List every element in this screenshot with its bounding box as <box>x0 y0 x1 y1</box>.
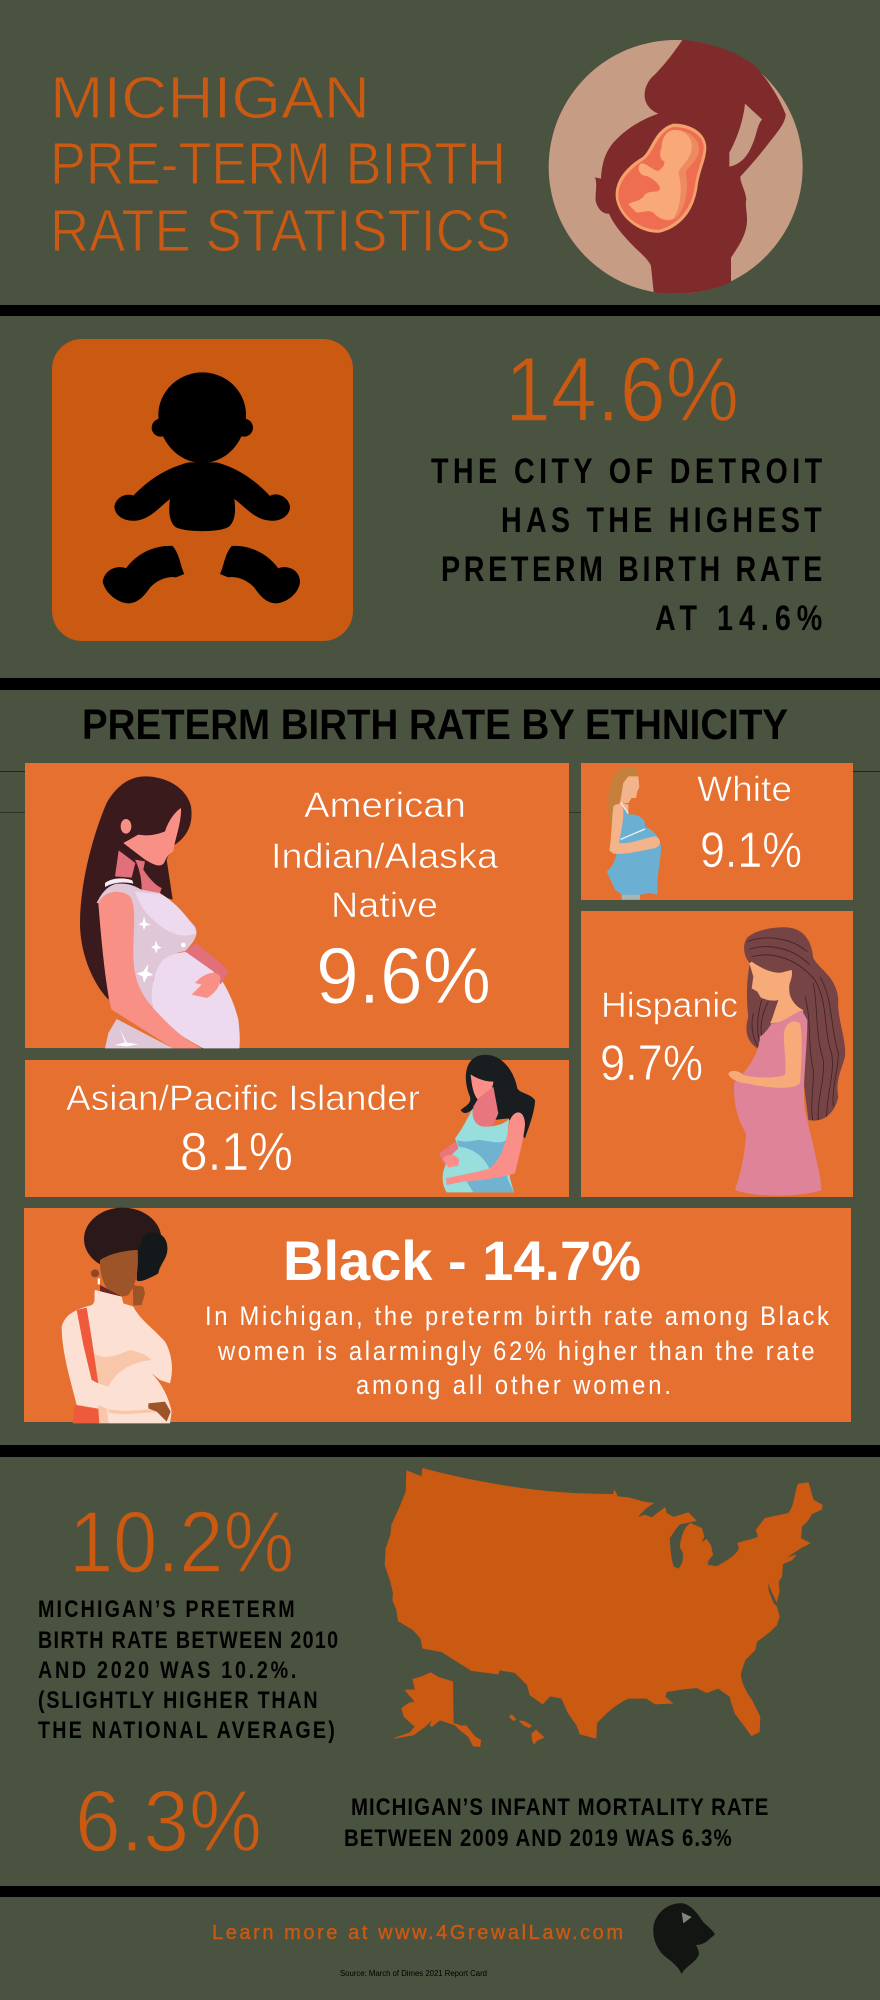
text block: Detroit statement: AT 14.6% <box>655 598 822 638</box>
title <box>50 65 511 264</box>
text block: disparity statement: women is alarmingly 62% higher than the rate <box>217 1337 815 1366</box>
heading and value: Black - 14.7% <box>283 1229 641 1292</box>
stat: 6.3%: 6.3% <box>75 1773 262 1870</box>
label and value <box>600 986 738 1091</box>
panel: American Indian/Alaska Native <box>25 763 569 1048</box>
title: PRE-TERM BIRTH <box>50 131 506 197</box>
label and value: 9.7% <box>600 1035 703 1091</box>
label and value: Indian/Alaska <box>271 837 499 876</box>
illustration: pregnant woman with long dark hair <box>80 776 240 1048</box>
panel: baby silhouette icon <box>52 339 353 641</box>
source note: Source: March of Dimes 2021 Report Card <box>340 1969 487 1978</box>
panel: Asian/Pacific Islander <box>25 1055 569 1197</box>
illustration: pregnant Black woman in cream sweater <box>62 1208 172 1423</box>
map: United States <box>385 1468 822 1747</box>
text block: Michigan preterm rate: MICHIGAN’S PRETERM <box>38 1595 295 1622</box>
text block: Detroit statement: HAS THE HIGHEST <box>501 500 822 540</box>
text block: Michigan preterm rate: THE NATIONAL AVERAGE) <box>38 1716 335 1743</box>
text block: Michigan preterm rate: (SLIGHTLY HIGHER THAN <box>38 1686 318 1713</box>
panel: Hispanic <box>581 911 853 1197</box>
text block: Michigan preterm rate: BIRTH RATE BETWEEN 2010 <box>38 1626 338 1653</box>
title: RATE STATISTICS <box>50 198 511 264</box>
text block: Detroit statement <box>431 451 823 638</box>
text block: Detroit statement: PRETERM BIRTH RATE <box>441 549 822 589</box>
label and value: Hispanic <box>601 986 738 1025</box>
text block: disparity statement <box>205 1302 829 1400</box>
illustration: pregnant woman in pink dress <box>728 927 845 1196</box>
label and value <box>66 1079 420 1182</box>
text block: disparity statement: among all other women. <box>356 1371 671 1400</box>
panel: Black <box>24 1208 851 1423</box>
heading: preterm birth rate by ethnicity: PRETERM BIRTH RATE BY ETHNICITY <box>82 701 788 749</box>
icon: pregnant silhouette with fetus <box>549 40 803 294</box>
label and value <box>271 786 499 1020</box>
text block: infant mortality: MICHIGAN’S INFANT MORTALITY RATE <box>351 1793 768 1820</box>
stat: 14.6%: 14.6% <box>505 339 739 441</box>
label and value: Asian/Pacific Islander <box>66 1079 420 1118</box>
text block: infant mortality: BETWEEN 2009 AND 2019 WAS 6.3% <box>344 1824 732 1851</box>
label and value: American <box>304 786 466 825</box>
panel: White <box>581 763 853 900</box>
text block: Detroit statement: THE CITY OF DETROIT <box>431 451 823 491</box>
text block: infant mortality <box>344 1793 768 1851</box>
label and value: White <box>697 770 792 809</box>
illustration: pregnant woman in blue dress <box>607 767 661 900</box>
text block: disparity statement: In Michigan, the preterm birth rate among Black <box>205 1302 829 1331</box>
label and value <box>697 770 802 878</box>
label and value: 9.6% <box>316 931 491 1020</box>
label and value: Native <box>331 886 438 925</box>
label and value: 9.1% <box>700 822 802 878</box>
label and value: 8.1% <box>180 1122 293 1182</box>
text block: Michigan preterm rate <box>38 1595 338 1743</box>
footer link: Learn more at www.4GrewalLaw.com <box>212 1922 623 1944</box>
text block: Michigan preterm rate: AND 2020 WAS 10.2%. <box>38 1656 296 1683</box>
illustration: pregnant woman in teal dress <box>439 1055 535 1192</box>
icon: lion logo <box>653 1903 715 1974</box>
stat: 10.2%: 10.2% <box>69 1494 294 1591</box>
title: MICHIGAN <box>50 65 370 131</box>
